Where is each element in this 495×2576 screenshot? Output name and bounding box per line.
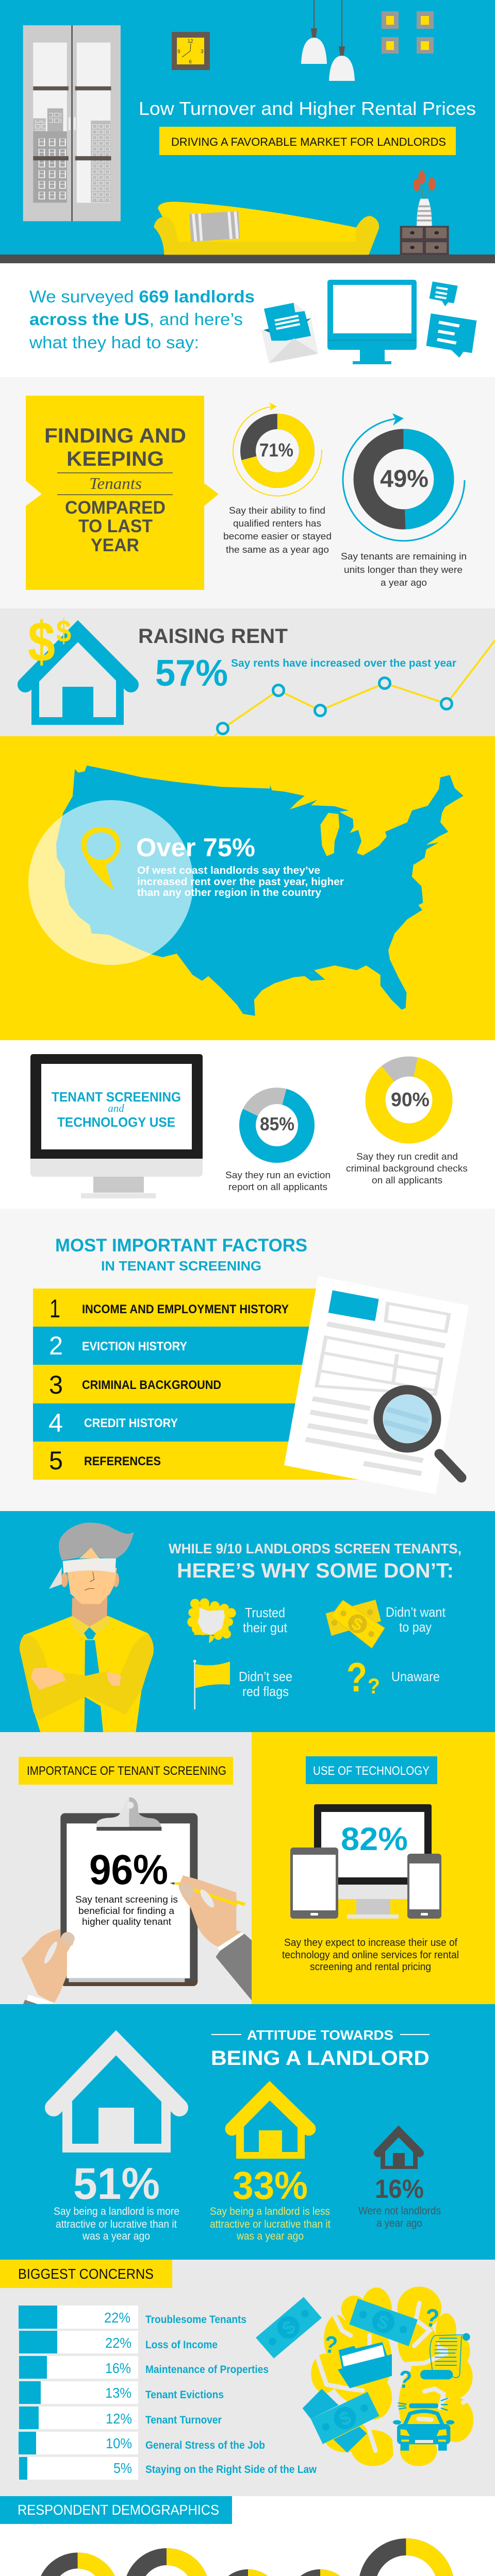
ranked list: 5: [49, 1446, 63, 1475]
icon: gut: [187, 1598, 236, 1643]
icon: vase and drawers: [400, 171, 449, 255]
bar chart: concerns: Staying on the Right Side of the Law: [145, 2464, 317, 2476]
ranked list: EVICTION HISTORY: [82, 1340, 187, 1353]
callout: yellow title box: YEAR: [91, 535, 139, 555]
icon: devices: [290, 1804, 441, 1919]
chart: 85 percent donut: [241, 1089, 313, 1161]
text block: trusted their gut: [243, 1605, 288, 1635]
panel: tenant screening and technology use: [0, 1040, 495, 1209]
bar chart: concerns: 5%: [113, 2460, 132, 2476]
heading: attitude towards being a landlord: BEING A LANDLORD: [211, 2047, 430, 2070]
bar chart: concerns: 13%: [105, 2385, 131, 2401]
text block: 85 percent caption: [225, 1170, 331, 1192]
chart: 90 percent donut: [369, 1060, 449, 1140]
text block: trusted their gut: Trusted: [245, 1605, 285, 1620]
illustration: worried brain: ?: [397, 2366, 413, 2395]
icon: window with city view: [23, 25, 121, 221]
ranked list: 4: [48, 1409, 63, 1437]
text block: west coast caption: increased rent over the past year, higher: [137, 876, 344, 888]
text block: 85 percent caption: report on all applicants: [228, 1182, 327, 1192]
chart: 71 percent donut: [233, 402, 322, 496]
callout: yellow title box: KEEPING: [67, 448, 164, 470]
text block: 82 percent caption: [282, 1937, 459, 1973]
icon: monitor with heading: TENANT SCREENING: [52, 1089, 181, 1105]
heading: raising rent: RAISING RENT: [138, 625, 288, 648]
icon: house with dollars: $: [56, 614, 71, 649]
text block: 96 percent caption: [75, 1894, 178, 1927]
text block: 71 percent caption: the same as a year ago: [226, 545, 329, 555]
text block: 16 percent caption: [358, 2205, 441, 2229]
icon: wall clock: 6: [189, 59, 192, 65]
panel: raising rent: [0, 608, 495, 736]
bar chart: concerns: 22%: [105, 2335, 131, 2351]
label: biggest concerns: BIGGEST CONCERNS: [18, 2266, 154, 2282]
panel: most important factors: [0, 1209, 495, 1511]
icon: question marks: ?: [346, 1654, 367, 1700]
text block: rent caption: Say rents have increased over the past year: [231, 657, 456, 669]
subtitle banner: [159, 127, 456, 155]
text block: did not see red flags: [239, 1669, 292, 1699]
icon: map pin: [81, 827, 121, 890]
panel: use of technology: [252, 1732, 495, 2004]
ranked list: CRIMINAL BACKGROUND: [82, 1378, 221, 1392]
heading: most important factors: MOST IMPORTANT FACTORS: [55, 1235, 307, 1256]
text block: 33 percent caption: was a year ago: [236, 2230, 304, 2242]
text block: 71 percent caption: qualified renters has: [233, 518, 321, 529]
text block: did not see red flags: Didn’t see: [239, 1669, 292, 1684]
label: importance of tenant screening: IMPORTANCE OF TENANT SCREENING: [27, 1764, 226, 1778]
stat: 16 percent: 16%: [375, 2174, 424, 2204]
text block: 96 percent caption: beneficial for finding a: [78, 1906, 175, 1916]
ranked list: 3: [49, 1370, 63, 1399]
bar chart: concerns: Troublesome Tenants: [145, 2314, 246, 2326]
text block: 16 percent caption: a year ago: [376, 2217, 422, 2229]
icon: red flag: [193, 1659, 230, 1709]
text block: 96 percent caption: higher quality tenant: [82, 1917, 171, 1927]
illustration: clipboard with hands: [22, 1797, 252, 2004]
heading: most important factors: IN TENANT SCREENING: [101, 1258, 261, 1274]
icon: money: $: [349, 1614, 366, 1635]
illustration: worried brain: $: [374, 2311, 392, 2334]
stat: 96 percent: 96%: [89, 1846, 168, 1893]
line chart: [214, 640, 495, 736]
text block: did not want to pay: [386, 1604, 446, 1635]
bar chart: concerns: 10%: [106, 2435, 132, 2451]
panel: attitude towards being a landlord: [0, 2004, 495, 2260]
label: respondent demographics: [0, 2496, 232, 2524]
heading: why some do not screen: WHILE 9/10 LANDLORDS SCREEN TENANTS,: [169, 1541, 461, 1556]
ranked list: 2: [49, 1331, 63, 1360]
bar chart: concerns: [19, 2306, 317, 2480]
text block: west coast caption: than any other region in the country: [137, 887, 322, 899]
text block: 33 percent caption: Say being a landlord is less: [210, 2206, 330, 2217]
ranked list: 1: [50, 1294, 60, 1323]
illustration: worried brain: $: [336, 2406, 354, 2430]
text block: survey statement: We surveyed 669 landlords: [29, 287, 255, 306]
bar chart: concerns: Tenant Evictions: [145, 2389, 224, 2401]
icon: money: [326, 1600, 385, 1648]
illustration: blindfolded landlord: [20, 1522, 154, 1732]
ranked list: INCOME AND EMPLOYMENT HISTORY: [82, 1302, 289, 1316]
label: biggest concerns: [0, 2260, 172, 2288]
text block: 16 percent caption: Were not landlords: [358, 2205, 441, 2217]
icon: wall clock: 3: [201, 49, 204, 55]
text block: 33 percent caption: attractive or lucrative than it: [210, 2218, 331, 2230]
stat: over 75 percent: Over 75%: [136, 833, 255, 862]
text block: survey statement: [29, 287, 255, 352]
text block: 49 percent caption: a year ago: [381, 578, 427, 588]
text block: 96 percent caption: Say tenant screening is: [75, 1894, 178, 1905]
chart: 90 percent donut: 90%: [391, 1089, 430, 1111]
callout: yellow title box: COMPARED: [65, 498, 166, 518]
callout: yellow title box: FINDING AND: [44, 425, 186, 447]
icon: house with dollars: $: [28, 611, 55, 674]
bar chart: concerns: Maintenance of Properties: [145, 2364, 269, 2376]
heading: attitude towards being a landlord: [211, 2027, 430, 2070]
bar chart: concerns: 16%: [105, 2360, 131, 2376]
icon: question marks: ?: [368, 1674, 380, 1698]
icon: desktop monitor: [327, 280, 417, 364]
text block: trusted their gut: their gut: [243, 1620, 288, 1635]
icon: small house: [378, 2131, 420, 2169]
text block: 90 percent caption: criminal background checks: [346, 1163, 468, 1174]
text block: 71 percent caption: Say their ability to find: [229, 505, 325, 516]
chart: 71 percent donut: 71%: [259, 439, 293, 461]
text block: 85 percent caption: Say they run an eviction: [225, 1170, 331, 1180]
icon: wall clock: 9: [177, 49, 180, 55]
heading: why some do not screen: HERE’S WHY SOME DON’T:: [177, 1560, 454, 1582]
ranked list: [33, 1289, 363, 1480]
icon: large house: [54, 2043, 179, 2153]
icon: monitor with heading: and: [108, 1102, 124, 1114]
illustration: worried brain: [256, 2286, 473, 2467]
bar chart: concerns: General Stress of the Job: [145, 2439, 265, 2451]
text block: 82 percent caption: screening and rental pricing: [310, 1961, 431, 1973]
icon: monitor with heading: [30, 1054, 203, 1198]
highlight circle: west coast: [28, 800, 193, 965]
icon: application form with magnifier: [284, 1276, 469, 1494]
bar chart: concerns: 22%: [104, 2310, 130, 2326]
bar chart: concerns: Loss of Income: [145, 2339, 218, 2351]
illustration: worried brain: $: [278, 2316, 300, 2339]
bar chart: concerns: Tenant Turnover: [145, 2414, 222, 2426]
icon: pendant lamps: [301, 0, 355, 81]
icon: yellow sofa: [154, 202, 379, 255]
text block: 51 percent caption: [54, 2206, 179, 2242]
callout: yellow title box: [26, 396, 219, 590]
stat: 82 percent: 82%: [341, 1821, 408, 1857]
icon: wall clock: 12: [187, 39, 193, 44]
icon: wall clock: [172, 32, 210, 70]
heading: why some do not screen: [169, 1541, 461, 1582]
stat: 33 percent: 33%: [233, 2164, 308, 2208]
icon: chat bubbles: [426, 281, 476, 358]
illustration: worried brain: ?: [323, 2330, 339, 2359]
stat: 51 percent: 51%: [73, 2159, 160, 2209]
text block: 49 percent caption: units longer than they were: [344, 565, 463, 575]
label: importance of tenant screening: [19, 1757, 233, 1785]
text block: 82 percent caption: Say they expect to increase their use of: [284, 1937, 457, 1948]
panel: hero room: [0, 0, 495, 263]
text block: 90 percent caption: on all applicants: [372, 1175, 442, 1185]
text block: 49 percent caption: Say tenants are remaining in: [341, 551, 467, 562]
icon: monitor with heading: TECHNOLOGY USE: [57, 1114, 175, 1130]
heading: attitude towards being a landlord: ATTITUDE TOWARDS: [247, 2027, 393, 2043]
text block: 90 percent caption: Say they run credit and: [356, 1151, 458, 1162]
ranked list: REFERENCES: [84, 1454, 161, 1468]
chart: 49 percent donut: [343, 413, 465, 541]
panel: why some do not screen: [0, 1511, 495, 1732]
title: Low Turnover and Higher Rental Prices: [139, 98, 476, 119]
chart: 13 percent donut, 5-10 properties: [294, 2575, 346, 2576]
panel: survey intro: [0, 263, 495, 377]
text block: 51 percent caption: attractive or lucrative than it: [56, 2218, 177, 2230]
text block: 71 percent caption: [223, 505, 332, 555]
icon: envelope: [261, 303, 318, 363]
text block: 33 percent caption: [210, 2206, 331, 2242]
chart: 23 percent donut: [132, 2556, 201, 2576]
chart: 21 percent donut: [45, 2561, 111, 2576]
text block: did not see red flags: red flags: [242, 1684, 289, 1699]
text block: 51 percent caption: Say being a landlord is more: [54, 2206, 179, 2217]
chart: 13 percent donut, 4-5 properties: [222, 2575, 274, 2576]
label: use of technology: [306, 1756, 437, 1784]
text block: did not want to pay: Didn’t want: [386, 1604, 446, 1620]
map: United States: [56, 766, 464, 1016]
panel: importance of tenant screening: [0, 1732, 252, 2004]
text block: survey statement: what they had to say:: [29, 333, 199, 352]
heading: most important factors: [55, 1235, 307, 1274]
icon: medium house: [232, 2091, 309, 2159]
text block: unaware: Unaware: [391, 1669, 440, 1684]
chart: 28 percent donut: [367, 2547, 446, 2576]
panel: biggest concerns: [0, 2260, 495, 2496]
text block: 49 percent caption: [341, 551, 467, 588]
panel: respondent demographics: [0, 2496, 495, 2576]
panel: west coast map: [0, 736, 495, 1040]
text block: survey statement: across the US , and here’s: [29, 310, 243, 329]
illustration: worried brain: ?: [423, 2303, 441, 2333]
icon: wall pictures: [382, 11, 434, 54]
text block: 82 percent caption: technology and online services for rental: [282, 1950, 459, 1961]
stat: 57 percent: 57%: [155, 653, 228, 694]
icon: house with dollars: [25, 611, 131, 725]
text block: west coast caption: [137, 865, 344, 899]
bar chart: concerns: 12%: [106, 2411, 132, 2427]
ranked list: CREDIT HISTORY: [84, 1416, 178, 1430]
chart: 85 percent donut: 85%: [260, 1113, 294, 1134]
text block: 90 percent caption: [346, 1151, 468, 1185]
text block: did not want to pay: to pay: [399, 1619, 432, 1635]
label: use of technology: USE OF TECHNOLOGY: [313, 1764, 430, 1778]
subtitle banner: DRIVING A FAVORABLE MARKET FOR LANDLORDS: [171, 135, 446, 148]
chart: 49 percent donut: 49%: [380, 465, 428, 492]
label: respondent demographics: RESPONDENT DEMOGRAPHICS: [18, 2502, 219, 2518]
text block: west coast caption: Of west coast landlords say they’ve: [137, 865, 320, 876]
text block: 71 percent caption: become easier or stayed: [223, 531, 332, 541]
callout: yellow title box: Tenants: [89, 474, 142, 493]
panel: finding and keeping tenants: [0, 377, 495, 608]
callout: yellow title box: TO LAST: [78, 516, 153, 536]
text block: 51 percent caption: was a year ago: [82, 2230, 150, 2242]
